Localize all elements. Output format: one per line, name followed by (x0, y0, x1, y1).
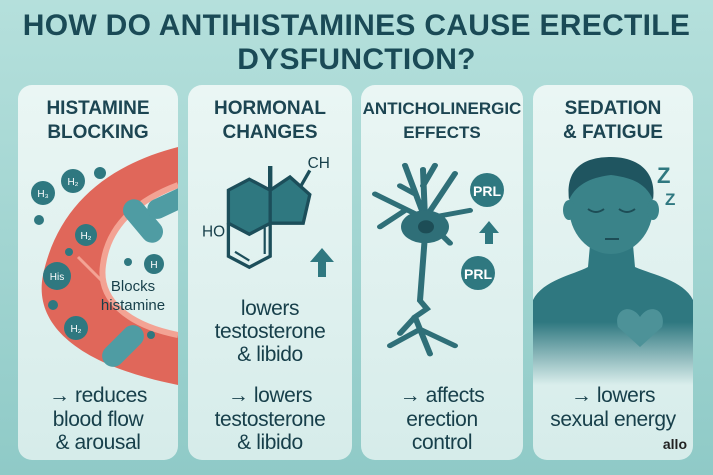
icon: steroid molecule: testosterone (215, 320, 325, 343)
title: DYSFUNCTION? (237, 43, 476, 76)
caption: → affects (400, 384, 484, 407)
icon: neuron with PRL (372, 162, 504, 356)
heading: histamine blocking (46, 98, 150, 143)
caption: blood flow (53, 408, 143, 430)
icon: steroid molecule: & libido (237, 343, 303, 366)
heading: hormonal changes: CHANGES (222, 122, 318, 143)
caption: sexual energy (550, 408, 676, 430)
caption (49, 384, 147, 454)
caption: & arousal (55, 431, 141, 454)
heading: hormonal changes (214, 98, 326, 143)
caption (550, 384, 676, 430)
illustration: sleeping man: Z (657, 163, 670, 188)
icon: steroid molecule: CH (308, 155, 330, 172)
caption (400, 384, 484, 454)
illustration: blood vessel with pills: His (50, 272, 64, 283)
caption: testosterone (215, 408, 325, 430)
icon: steroid molecule: HO (202, 223, 225, 240)
heading: histamine blocking: BLOCKING (47, 122, 149, 143)
caption: → lowers (228, 384, 312, 407)
heading: anticholinergic effects (363, 99, 521, 142)
logo: allo: allo (663, 436, 687, 452)
icon: steroid molecule: lowers (241, 297, 299, 320)
illustration: sleeping man: Z (665, 190, 675, 209)
caption (214, 384, 325, 454)
heading: sedation & fatigue: & FATIGUE (563, 122, 663, 143)
panel: anticholinergic effects (361, 85, 523, 460)
caption: control (412, 431, 472, 454)
title (23, 9, 690, 76)
heading: sedation & fatigue (563, 98, 663, 143)
caption: & libido (237, 431, 303, 454)
heading: sedation & fatigue: SEDATION (565, 98, 661, 119)
illustration: blood vessel with pills: H₂ (70, 324, 82, 335)
title: HOW DO ANTIHISTAMINES CAUSE ERECTILE (23, 9, 690, 42)
illustration: blood vessel with pills: H₃ (37, 189, 49, 200)
illustration: blood vessel with pills (31, 147, 178, 385)
icon: steroid molecule (202, 155, 334, 366)
panel: histamine blocking (18, 85, 178, 460)
illustration: blood vessel with pills: histamine (101, 297, 165, 314)
panel: hormonal changes (188, 85, 352, 460)
panel: sedation & fatigue (533, 85, 693, 460)
caption: → lowers (571, 384, 655, 407)
illustration: blood vessel with pills: H₂ (80, 231, 92, 242)
icon: neuron with PRL: PRL (464, 266, 492, 282)
heading: histamine blocking: HISTAMINE (46, 98, 150, 119)
heading: anticholinergic effects: ANTICHOLINERGIC (363, 99, 521, 118)
icon: neuron with PRL: PRL (473, 183, 501, 199)
caption: → reduces (49, 384, 147, 407)
illustration: blood vessel with pills: H₂ (67, 177, 79, 188)
illustration: blood vessel with pills: Blocks (111, 278, 155, 295)
heading: hormonal changes: HORMONAL (214, 98, 326, 119)
illustration: sleeping man (533, 157, 693, 382)
caption: erection (406, 408, 478, 430)
heading: anticholinergic effects: EFFECTS (403, 123, 481, 142)
illustration: blood vessel with pills: H (150, 260, 158, 271)
